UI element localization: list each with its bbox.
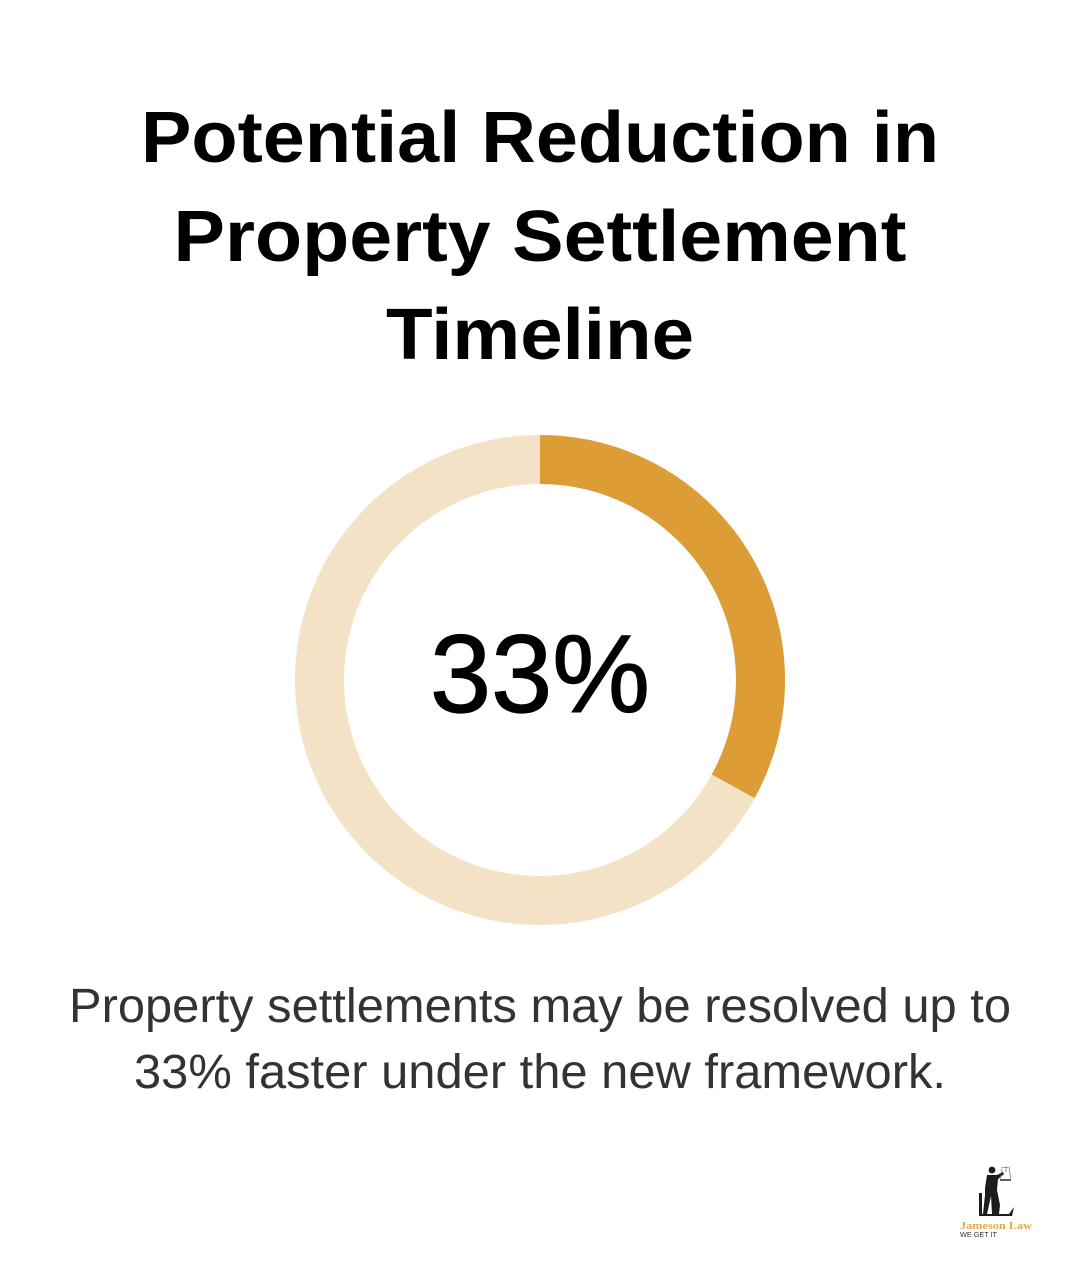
description text — [69, 980, 1011, 1099]
description text: 33% faster under the new framework. — [134, 1046, 946, 1099]
title: Timeline — [386, 295, 694, 375]
logo tagline: WE GET IT — [960, 1232, 998, 1239]
logo: Jameson Law — [960, 1166, 1032, 1239]
description text: Property settlements may be resolved up to — [69, 980, 1011, 1033]
donut chart: 33 percent — [320, 460, 761, 900]
title — [141, 98, 939, 375]
title: Property Settlement — [174, 197, 907, 277]
center percentage: 33% — [430, 613, 650, 736]
title: Potential Reduction in — [141, 98, 939, 178]
donut track — [320, 460, 760, 900]
logo name: Jameson Law — [960, 1220, 1032, 1232]
icon: lady justice — [979, 1166, 1014, 1216]
donut value arc — [540, 460, 761, 786]
